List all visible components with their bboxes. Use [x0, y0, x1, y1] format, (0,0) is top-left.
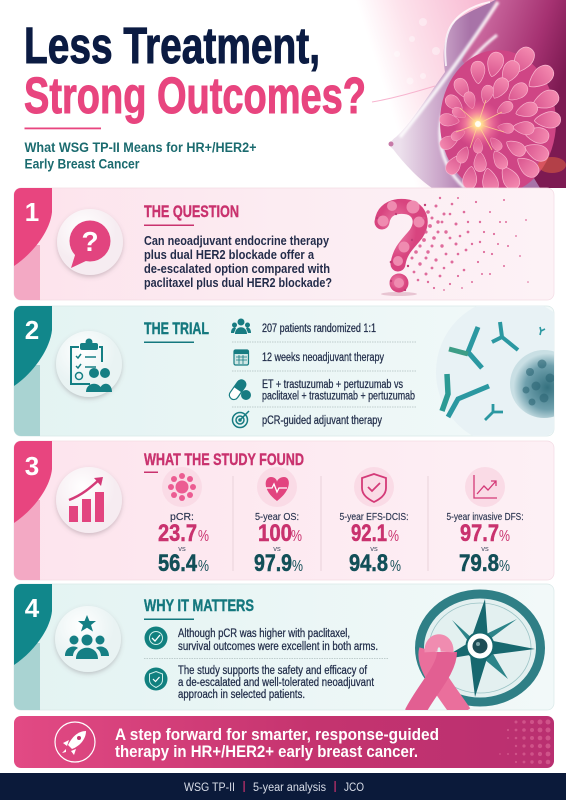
trial list: pCR-guided adjuvant therapy — [262, 415, 382, 427]
trial list: paclitaxel + trastuzumab + pertuzumab — [262, 390, 415, 402]
panel 2: the trial — [14, 306, 554, 436]
stat: pCR: pCR: — [170, 511, 194, 523]
icon: dissolving question mark — [376, 197, 529, 296]
number tab 3 — [14, 441, 52, 580]
stat: 5-year EFS-DCIS: % — [390, 558, 401, 575]
title: Less Treatment, — [24, 17, 320, 74]
trial list: 12 weeks neoadjuvant therapy — [262, 352, 384, 364]
subtitle: Early Breast Cancer — [24, 156, 140, 172]
illustration: antibodies and cell — [439, 306, 554, 436]
stat: pCR: 56.4 — [158, 550, 198, 577]
stat: 5-year OS: vs — [273, 544, 281, 553]
number tab 4: 4 — [25, 593, 40, 623]
stat: 5-year invasive DFS — [446, 467, 524, 577]
stat: pCR: % — [198, 528, 209, 545]
halftone dots — [499, 720, 550, 764]
stat: 5-year EFS-DCIS: vs — [370, 544, 378, 553]
point: survival outcomes — [144, 626, 378, 653]
title: Strong Outcomes? — [24, 67, 366, 124]
question text: plus dual HER2 blockade offer a — [144, 248, 315, 262]
point: survival outcomes: survival outcomes were excellent in both arms. — [178, 641, 378, 653]
trial list: 207 patients randomized 1:1 — [262, 323, 376, 335]
point: safety and efficacy: approach in selected patients. — [178, 689, 305, 701]
footer: JCO — [344, 782, 364, 794]
point: survival outcomes: Although pCR was higher with paclitaxel, — [178, 628, 350, 640]
heading: THE TRIAL — [144, 319, 209, 338]
panel 4: why it matters — [14, 584, 554, 714]
heading: THE QUESTION — [144, 202, 239, 221]
banner text: A step forward for smarter, response-guided — [115, 725, 439, 744]
number tab 3: 3 — [25, 451, 39, 481]
outer petals — [438, 44, 561, 194]
number tab 2: 2 — [25, 315, 39, 345]
stat: 5-year EFS-DCIS: 94.8 — [349, 550, 388, 577]
number tab 1 — [14, 188, 52, 300]
point: safety and efficacy: The study supports the safety and efficacy of — [178, 665, 368, 677]
icon: capsule and pill — [228, 378, 251, 401]
icon: question bubble: ? — [81, 226, 99, 257]
stat: 5-year invasive DFS: % — [499, 528, 510, 545]
question text: paclitaxel plus dual HER2 blockade? — [144, 276, 332, 290]
panel 3: what the study found — [14, 441, 554, 580]
question text: de-escalated option compared with — [144, 262, 330, 276]
heading: WHY IT MATTERS — [144, 596, 254, 615]
stat: 5-year EFS-DCIS: % — [388, 528, 399, 545]
footer: WSG TP-II — [184, 782, 235, 794]
stat: pCR — [158, 467, 209, 577]
number tab 1: 1 — [25, 197, 39, 227]
panel 1: the question — [14, 188, 554, 300]
stat: pCR: % — [198, 558, 209, 575]
stat: 5-year OS: 97.9 — [254, 550, 292, 577]
number tab 2 — [14, 306, 52, 436]
stat: 5-year EFS-DCIS: 5-year EFS-DCIS: — [340, 511, 408, 523]
subtitle — [24, 140, 257, 172]
heading: WHAT THE STUDY FOUND — [144, 450, 304, 469]
stat: 5-year invasive DFS: vs — [481, 544, 489, 553]
stat: 5-year OS: 5-year OS: — [255, 511, 299, 523]
icon: question bubble — [57, 209, 123, 275]
icon: target — [232, 411, 249, 428]
footer — [0, 773, 566, 800]
footer: 5-year analysis — [253, 782, 326, 794]
banner: take-home message — [14, 716, 554, 768]
trial list: ET + trastuzumab + pertuzumab vs — [262, 379, 403, 391]
stat: pCR: 23.7 — [158, 520, 197, 547]
question text: Can neoadjuvant endocrine therapy — [144, 234, 329, 248]
stat: 5-year OS: % — [291, 528, 302, 545]
banner text: therapy in HR+/HER2+ early breast cancer. — [115, 742, 418, 761]
stat: 5-year invasive DFS: 5-year invasive DFS: — [446, 511, 524, 523]
stat: 5-year OS — [254, 467, 303, 577]
stat: pCR: vs — [178, 544, 186, 553]
stat: 5-year invasive DFS: % — [499, 558, 510, 575]
hero illustration: breast with glowing lobules — [368, 0, 566, 188]
subtitle: What WSG TP-II Means for HR+/HER2+ — [24, 140, 257, 155]
stat: 5-year OS: 100 — [258, 520, 292, 547]
point: safety and efficacy: a de-escalated and well-tolerated neoadjuvant — [178, 677, 375, 689]
question text — [144, 234, 332, 290]
stat: 5-year EFS-DCIS: 92.1 — [351, 520, 387, 547]
number tab 4 — [14, 584, 52, 710]
icon: calendar — [234, 350, 248, 365]
title — [24, 17, 366, 124]
stat: 5-year invasive DFS: 97.7 — [460, 520, 499, 547]
illustration: compass and pink ribbon — [414, 594, 540, 714]
icon: team with star — [55, 606, 121, 672]
banner text — [115, 725, 439, 761]
stat: 5-year EFS-DCIS — [340, 467, 408, 577]
icon: clipboard with patients — [56, 331, 122, 397]
icon: rising bar chart — [56, 467, 122, 533]
point: safety and efficacy — [144, 665, 375, 701]
icon: people — [231, 318, 251, 334]
trial list — [228, 318, 416, 428]
stat: 5-year invasive DFS: 79.8 — [459, 550, 499, 577]
stat: 5-year OS: % — [292, 558, 303, 575]
icon: rocket — [55, 722, 95, 762]
